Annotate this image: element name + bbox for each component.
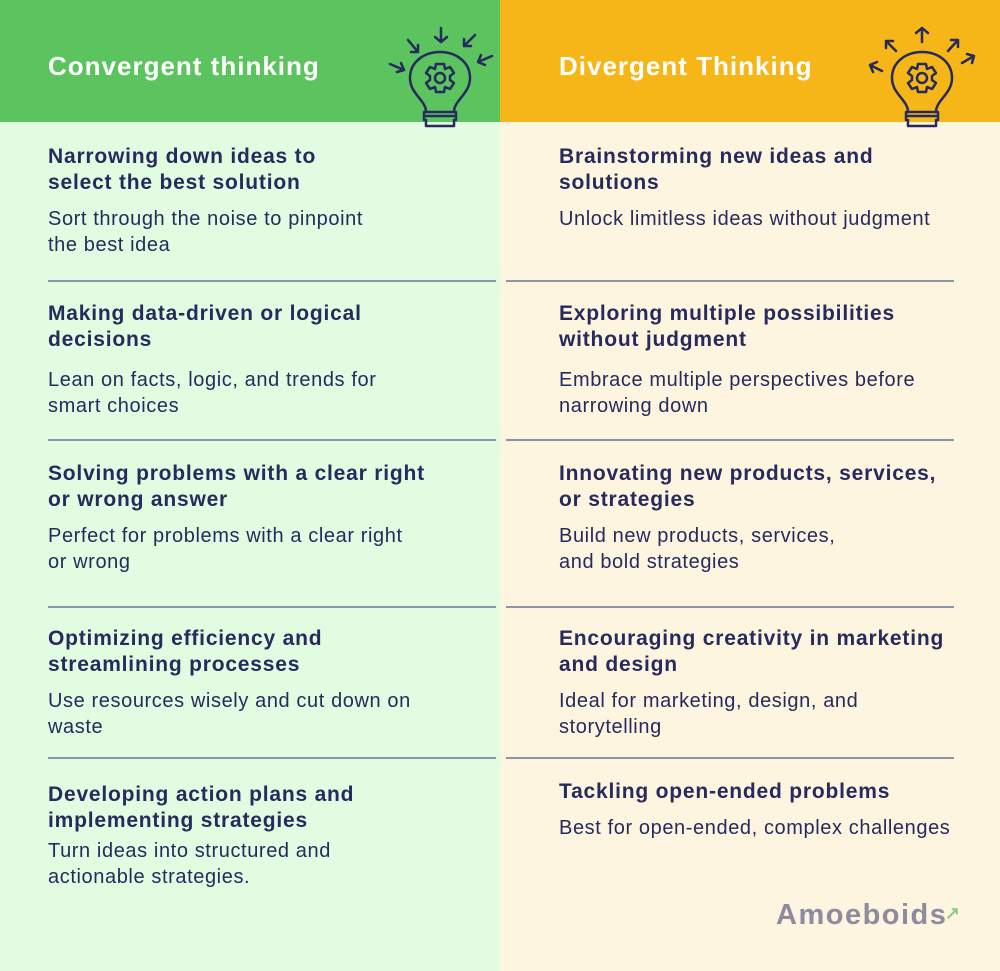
logo: Amoeboids: Amoeboids bbox=[776, 899, 947, 931]
panel: divergent thinking: Exploring multiple possibilities bbox=[559, 302, 895, 325]
panel: convergent thinking: or wrong bbox=[48, 551, 131, 573]
icon: bulb with outward arrows bbox=[868, 26, 976, 128]
panel: convergent thinking: select the best solution bbox=[48, 171, 301, 194]
panel: convergent thinking: or wrong answer bbox=[48, 488, 228, 511]
item 5 bbox=[48, 783, 354, 888]
panel: convergent thinking: implementing strategies bbox=[48, 809, 308, 832]
header: divergent bbox=[500, 0, 1000, 122]
panel: divergent thinking: solutions bbox=[559, 171, 660, 194]
panel: divergent thinking: Best for open-ended, complex challenges bbox=[559, 817, 950, 839]
item 2 bbox=[48, 302, 376, 417]
panel: convergent thinking: streamlining processes bbox=[48, 653, 300, 676]
panel: convergent thinking: decisions bbox=[48, 328, 152, 351]
panel: convergent thinking bbox=[0, 0, 500, 971]
item 1 bbox=[48, 145, 363, 256]
panel: convergent thinking: actionable strategies. bbox=[48, 866, 250, 888]
panel: divergent thinking: Unlock limitless ideas without judgment bbox=[559, 208, 930, 230]
panel: divergent thinking: and design bbox=[559, 653, 678, 676]
panel: divergent thinking: or strategies bbox=[559, 488, 695, 511]
panel: divergent thinking: and bold strategies bbox=[559, 551, 739, 573]
item 5 bbox=[559, 780, 950, 839]
panel: divergent thinking: Embrace multiple perspectives before bbox=[559, 369, 915, 391]
panel: convergent thinking: Use resources wisely and cut down on bbox=[48, 690, 411, 712]
panel: divergent thinking: Innovating new products, services, bbox=[559, 462, 936, 485]
item 2 bbox=[559, 302, 915, 417]
heading: Convergent thinking: Convergent thinking bbox=[48, 51, 320, 81]
panel: convergent thinking: Narrowing down ideas to bbox=[48, 145, 316, 168]
panel: divergent thinking: Tackling open-ended problems bbox=[559, 780, 890, 803]
item 3 bbox=[48, 462, 425, 573]
panel: convergent thinking: Sort through the noise to pinpoint bbox=[48, 208, 363, 230]
item 3 bbox=[559, 462, 936, 573]
item 4 bbox=[48, 627, 411, 738]
panel: convergent thinking: smart choices bbox=[48, 395, 179, 417]
panel: divergent thinking: Build new products, services, bbox=[559, 525, 835, 547]
icon: bulb with inward arrows bbox=[388, 26, 494, 128]
header: convergent bbox=[0, 0, 500, 122]
panel: divergent thinking: Brainstorming new ideas and bbox=[559, 145, 874, 168]
panel: convergent thinking: Making data-driven or logical bbox=[48, 302, 362, 325]
panel: convergent thinking: Solving problems with a clear right bbox=[48, 462, 425, 485]
panel: convergent thinking: Developing action plans and bbox=[48, 783, 354, 806]
panel: convergent thinking: Lean on facts, logic, and trends for bbox=[48, 369, 376, 391]
item 4 bbox=[559, 627, 944, 738]
panel: divergent thinking: narrowing down bbox=[559, 395, 709, 417]
panel: convergent thinking: waste bbox=[48, 716, 103, 738]
panel: divergent thinking: ↗ bbox=[945, 903, 961, 923]
panel: divergent thinking: Encouraging creativity in marketing bbox=[559, 627, 944, 650]
panel: convergent thinking: Optimizing efficiency and bbox=[48, 627, 322, 650]
panel: divergent thinking: without judgment bbox=[559, 328, 747, 351]
panel: divergent thinking: storytelling bbox=[559, 716, 662, 738]
panel: convergent thinking: the best idea bbox=[48, 234, 170, 256]
panel: convergent thinking: Perfect for problems with a clear right bbox=[48, 525, 403, 547]
item 1 bbox=[559, 145, 930, 230]
panel: convergent thinking: Turn ideas into structured and bbox=[48, 840, 331, 862]
panel: divergent thinking: Ideal for marketing, design, and bbox=[559, 690, 858, 712]
heading: Divergent Thinking: Divergent Thinking bbox=[559, 51, 812, 81]
panel: divergent thinking bbox=[500, 0, 1000, 971]
